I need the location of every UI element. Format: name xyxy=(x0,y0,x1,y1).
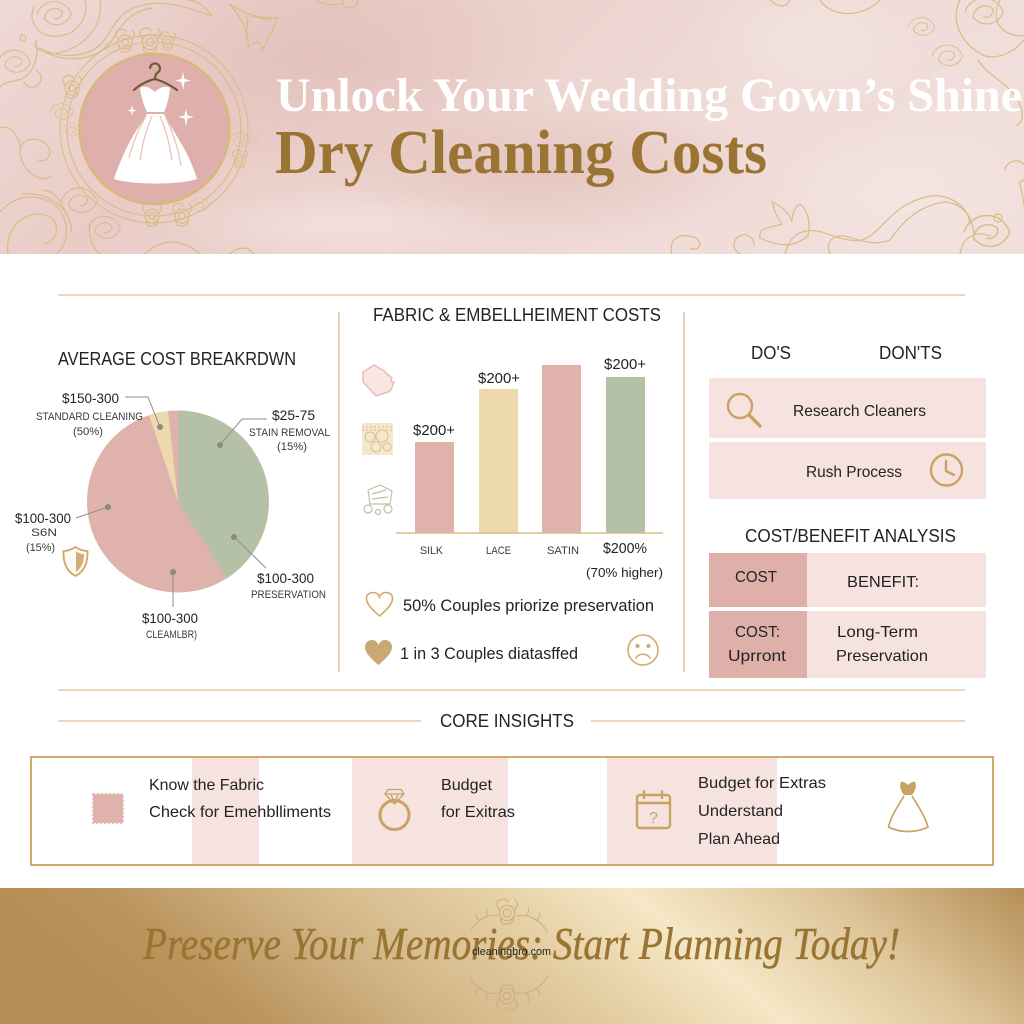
insight: budget: for Exitras xyxy=(441,804,515,821)
label: cleaning xyxy=(142,569,198,641)
heading: cost benefit: COST/BENEFIT ANALYSIS xyxy=(745,526,956,546)
bar chart xyxy=(396,356,663,580)
table: cost benefit: Uprront xyxy=(728,648,787,665)
section dividers xyxy=(58,295,965,721)
header banner xyxy=(0,0,1024,265)
bar: fourth fabric: $200+ xyxy=(604,356,646,373)
panel: average cost breakdown xyxy=(15,349,330,641)
ornament: top right scrollwork xyxy=(770,0,1024,126)
insight: know the fabric: Know the Fabric xyxy=(149,777,264,794)
label: preservation: PRESERVATION xyxy=(251,589,326,601)
icon: calendar: ? xyxy=(649,810,658,827)
label: preservation xyxy=(231,534,326,601)
row: rush process xyxy=(709,442,986,499)
ornament: bottom floral xyxy=(470,976,548,1010)
panel: dos and donts xyxy=(709,343,986,678)
bar: silk: SILK xyxy=(420,545,444,557)
label: s6n xyxy=(15,504,111,554)
ornament: top floral xyxy=(471,899,547,932)
medallion: gown icon xyxy=(80,54,230,204)
icon: hanger xyxy=(134,63,177,90)
row: rush process: Rush Process xyxy=(806,464,902,481)
stat: 50 percent: 50% Couples priorize preservation xyxy=(403,596,654,615)
heading: dos: DO'S xyxy=(751,343,791,363)
heading: donts: DON'TS xyxy=(879,343,942,363)
footer call to action: Preserve Your Memories: Start Planning Today! xyxy=(142,918,900,969)
icon: white gown xyxy=(114,87,197,184)
insight: budget xyxy=(441,777,515,821)
label: standard cleaning: $150-300 xyxy=(62,390,119,406)
label: standard cleaning: (50%) xyxy=(73,426,103,438)
ornament: bottom right scrollwork xyxy=(671,161,1024,254)
bar: fourth fabric xyxy=(586,356,663,580)
medallion frame rings xyxy=(50,28,259,226)
stat: 50 percent xyxy=(366,592,654,616)
icon: diamond ring xyxy=(380,790,409,830)
heading: core insights: CORE INSIGHTS xyxy=(440,711,574,731)
bar: silk: $200+ xyxy=(413,422,455,439)
insight: budget: Budget xyxy=(441,777,493,794)
panel: core insights xyxy=(31,757,993,865)
insight: budget extras list xyxy=(698,775,826,848)
icon: fabric swatch xyxy=(363,365,394,396)
bar: fourth fabric: (70% higher) xyxy=(586,565,663,580)
label: s6n: S6N xyxy=(31,527,57,539)
pie chart xyxy=(87,410,269,592)
label: stain removal xyxy=(217,407,330,453)
heading: fabric costs: FABRIC & EMBELLHEIMENT COSTS xyxy=(373,305,661,325)
icon: shield xyxy=(63,547,88,576)
stat: 1 in 3: 1 in 3 Couples diatasffed xyxy=(400,644,578,663)
icon: lace swatch xyxy=(362,423,393,455)
insight: know the fabric: Check for Emehblliments xyxy=(149,804,331,821)
table: cost benefit: Preservation xyxy=(836,648,928,665)
insight: budget extras list: Plan Ahead xyxy=(698,831,780,848)
title line 1: Unlock Your Wedding Gown’s Shine xyxy=(276,69,1022,122)
label: stain removal: (15%) xyxy=(277,441,307,453)
table: cost benefit xyxy=(709,553,986,678)
icon: fabric square xyxy=(93,794,123,823)
icon: sad face xyxy=(628,635,658,665)
footer banner xyxy=(0,888,1024,1024)
label: standard cleaning xyxy=(36,390,163,438)
label: s6n: $100-300 xyxy=(15,510,71,526)
label: stain removal: STAIN REMOVAL xyxy=(249,427,330,439)
label: cleaning: CLEAMLBR) xyxy=(146,629,197,641)
heading: average cost: AVERAGE COST BREAKRDWN xyxy=(58,349,296,369)
watermark: cleaningbro.com xyxy=(472,946,551,958)
label: s6n: (15%) xyxy=(26,542,55,554)
bar: satin xyxy=(542,365,581,557)
bar: lace: LACE xyxy=(486,545,511,557)
title line 2: Dry Cleaning Costs xyxy=(275,119,767,187)
row: research cleaners xyxy=(709,378,986,438)
icon: embellishment xyxy=(364,485,392,514)
table: cost benefit: COST xyxy=(735,569,777,586)
icon: calendar xyxy=(637,792,670,828)
panel: fabric and embellishment costs xyxy=(362,305,663,665)
label: stain removal: $25-75 xyxy=(272,407,315,423)
row: research cleaners: Research Cleaners xyxy=(793,403,926,420)
table: cost benefit: COST: xyxy=(735,624,780,641)
icon: dress outline xyxy=(888,782,928,832)
ornament: top left scrollwork xyxy=(0,0,358,88)
stat: 1 in 3 xyxy=(365,640,578,665)
label: preservation: $100-300 xyxy=(257,570,314,586)
table: cost benefit: BENEFIT: xyxy=(847,574,919,591)
insight: know the fabric xyxy=(149,777,331,821)
insight: budget extras list: Understand xyxy=(698,803,783,820)
bar: lace xyxy=(478,370,520,557)
icon: sparkles xyxy=(127,72,194,126)
label: standard cleaning: STANDARD CLEANING xyxy=(36,411,143,423)
label: cleaning: $100-300 xyxy=(142,610,198,626)
bar: satin: SATIN xyxy=(547,545,579,557)
bar: lace: $200+ xyxy=(478,370,520,387)
bar: silk xyxy=(413,422,455,557)
insight: budget extras list: Budget for Extras xyxy=(698,775,826,792)
ornament: bottom left scrollwork xyxy=(0,127,254,254)
bar: fourth fabric: $200% xyxy=(603,540,647,557)
table: cost benefit: Long-Term xyxy=(837,624,918,641)
